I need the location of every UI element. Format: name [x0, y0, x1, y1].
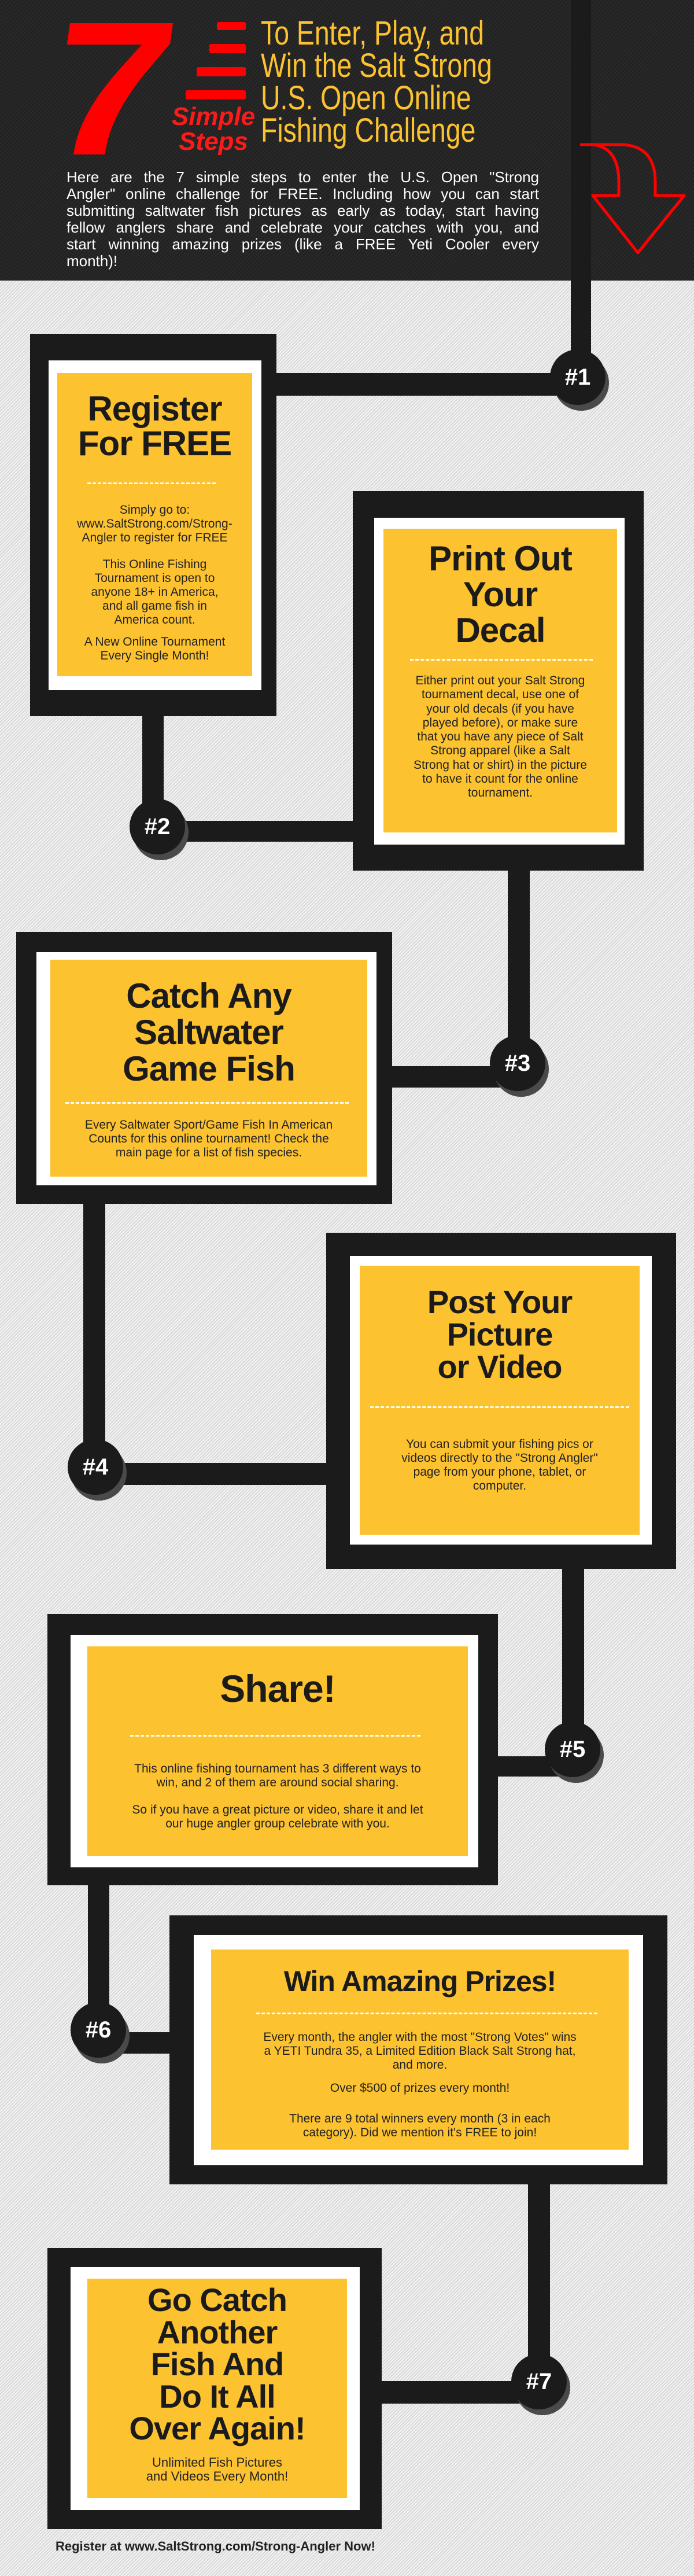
text: catch body: Counts for this online tournament! Check the [88, 1132, 329, 1145]
text: decal body: your old decals (if you have [426, 702, 574, 716]
step marker #5: #5 [560, 1737, 585, 1762]
text: post body: videos directly to the "Strong Angler" [401, 1451, 598, 1465]
text: catch body: Every Saltwater Sport/Game Fish In American [85, 1118, 333, 1132]
Simple Steps text: Steps [179, 127, 248, 156]
text: share body: This online fishing tournament has 3 different ways to [134, 1762, 421, 1775]
heading: Go Catch Another Fish: Another [157, 2314, 277, 2350]
text: catch body: main page for a list of fish species. [116, 1146, 302, 1159]
intro paragraph: start winning amazing prizes (like a FREE Yeti Cooler every [67, 235, 539, 253]
text: decal body: tournament decal, use one of [422, 688, 579, 701]
text: share body: win, and 2 of them are around social sharing. [156, 1776, 399, 1789]
text: prizes body [263, 2030, 577, 2072]
heading: Go Catch Another Fish [129, 2282, 305, 2446]
step marker #2 [130, 799, 189, 860]
heading: Print Out Your Decal: Your [463, 575, 537, 614]
panel: step 6 prizes: There are 9 total winners every month (3 in each [289, 2112, 551, 2125]
panel: step 6 prizes: Over $500 of prizes every month! [330, 2081, 510, 2095]
text: catch body [85, 1118, 333, 1159]
red bars icon [186, 22, 246, 99]
heading: Post Your Picture or Video: Picture [447, 1316, 552, 1353]
step marker #3: #3 [505, 1051, 530, 1076]
intro paragraph: Angler" online challenge for FREE. Including how you can start [67, 185, 539, 202]
step marker #4: #4 [83, 1454, 108, 1480]
step marker #7: #7 [526, 2369, 552, 2394]
heading: Go Catch Another Fish: Go Catch [147, 2282, 287, 2318]
heading: Print Out Your Decal: Decal [455, 611, 545, 650]
panel: step 6 prizes [169, 1915, 667, 2184]
Simple Steps text: Simple [172, 102, 255, 131]
heading: Print Out Your Decal: Print Out [429, 539, 572, 578]
step marker #6: #6 [86, 2017, 111, 2043]
step marker #1 [551, 351, 609, 411]
heading: Go Catch Another Fish: Do It All [159, 2378, 275, 2415]
heading: Post Your Picture or Video: or Video [437, 1348, 562, 1385]
heading: Catch Any Saltwater Game Fish: Saltwater [134, 1013, 283, 1052]
heading: Share!: Share! [220, 1667, 335, 1710]
arrow: down [579, 143, 686, 255]
text: decal body [414, 674, 587, 799]
header title [261, 14, 492, 149]
heading: Go Catch Another Fish: Over Again! [129, 2410, 305, 2446]
panel: step 5 share [47, 1614, 498, 1885]
panel: step 7 repeat [47, 2248, 382, 2529]
text: register body: www.SaltStrong.com/Strong- [77, 517, 232, 530]
heading: Catch Any Saltwater Game Fish: Catch Any [126, 976, 291, 1015]
panel: step 1 register: anyone 18+ in America, [91, 585, 219, 599]
heading: Register For FREE: Register [87, 389, 222, 428]
step marker #7 [511, 2356, 570, 2415]
heading: Print Out Your Decal [429, 539, 573, 650]
heading: Post Your Picture or Video: Post Your [427, 1284, 572, 1320]
Simple Steps text [172, 102, 255, 156]
panel: step 1 register: This Online Fishing [103, 558, 206, 571]
panel: step 2 decal [353, 491, 644, 871]
panel: step 1 register: Tournament is open to [95, 572, 215, 585]
step marker #5 [545, 1724, 604, 1783]
panel: step 1 register [30, 334, 276, 716]
text: unlimited: Unlimited Fish Pictures [152, 2455, 282, 2470]
text: register body: Simply go to: [120, 503, 190, 517]
panel: step 4 post [326, 1233, 676, 1569]
heading: Post Your Picture or Video [427, 1284, 573, 1385]
text: post body: You can submit your fishing pics or [406, 1438, 593, 1451]
header title: Fishing Challenge [261, 112, 475, 149]
text: register body [77, 503, 232, 544]
intro paragraph: month)! [67, 252, 117, 270]
header title: To Enter, Play, and [261, 14, 484, 52]
text: decal body: Either print out your Salt Strong [415, 674, 585, 687]
text: decal body: Strong apparel (like a Salt [430, 744, 570, 757]
panel: step 6 prizes: category). Did we mention it's FREE to join! [303, 2126, 537, 2139]
heading: Catch Any Saltwater Game Fish: Game Fish [123, 1049, 295, 1088]
heading: Register For FREE [78, 389, 231, 463]
panel: step 1 register: Every Single Month! [101, 649, 209, 662]
text: decal body: that you have any piece of Salt [417, 730, 584, 743]
step marker #2: #2 [145, 814, 170, 839]
text: decal body: played before), or make sure [423, 716, 578, 729]
text: decal body: tournament. [468, 786, 533, 799]
panel: step 5 share: So if you have a great picture or video, share it and let [132, 1803, 423, 1816]
heading: Win Amazing Prizes!: Win Amazing Prizes! [284, 1965, 556, 1998]
step marker #4 [68, 1441, 127, 1501]
text: share body [134, 1762, 421, 1789]
text: register body: Angler to register for FREE [82, 531, 228, 544]
header background [0, 0, 694, 281]
text: unlimited [146, 2455, 288, 2483]
panel: step 1 register: A New Online Tournament [84, 635, 225, 648]
intro paragraph [67, 168, 539, 270]
text: decal body: to have it count for the online [422, 772, 578, 786]
heading: Go Catch Another Fish: Fish And [151, 2346, 283, 2382]
text: post body: computer. [473, 1479, 526, 1492]
text: decal body: Strong hat or shirt) in the picture [414, 758, 587, 772]
step marker #3 [490, 1037, 549, 1097]
panel: step 1 register: and all game fish in [102, 599, 207, 613]
connectors [272, 373, 578, 396]
intro paragraph: fellow anglers share and celebrate your catches with you, and [67, 219, 539, 236]
intro paragraph: Here are the 7 simple steps to enter the U.S. Open "Strong [67, 168, 539, 186]
path line to #1 [571, 0, 591, 376]
header title: U.S. Open Online [261, 79, 471, 117]
text: prizes body: a YETI Tundra 35, a Limited Edition Black Salt Strong hat, [264, 2044, 575, 2058]
heading: Register For FREE: For FREE [78, 424, 231, 463]
step marker #6 [71, 2004, 130, 2063]
text: post body: page from your phone, tablet, or [414, 1465, 586, 1479]
footer call to action: Register at www.SaltStrong.com/Strong-Angler Now! [56, 2539, 375, 2553]
panel: step 5 share: our huge angler group celebrate with you. [165, 1817, 390, 1830]
text: prizes body: and more. [393, 2058, 447, 2072]
heading: Catch Any Saltwater Game Fish [123, 976, 295, 1088]
panel: step 3 catch [16, 932, 392, 1204]
panel: step 1 register: America count. [114, 613, 195, 627]
step marker #1: #1 [565, 364, 590, 390]
header title: Win the Salt Strong [261, 47, 492, 84]
text: prizes body: Every month, the angler with the most "Strong Votes" wins [263, 2030, 577, 2044]
text: post body [401, 1438, 598, 1492]
text: unlimited: and Videos Every Month! [146, 2469, 288, 2483]
intro paragraph: submitting saltwater fish pictures as early as today, start having [67, 202, 539, 219]
